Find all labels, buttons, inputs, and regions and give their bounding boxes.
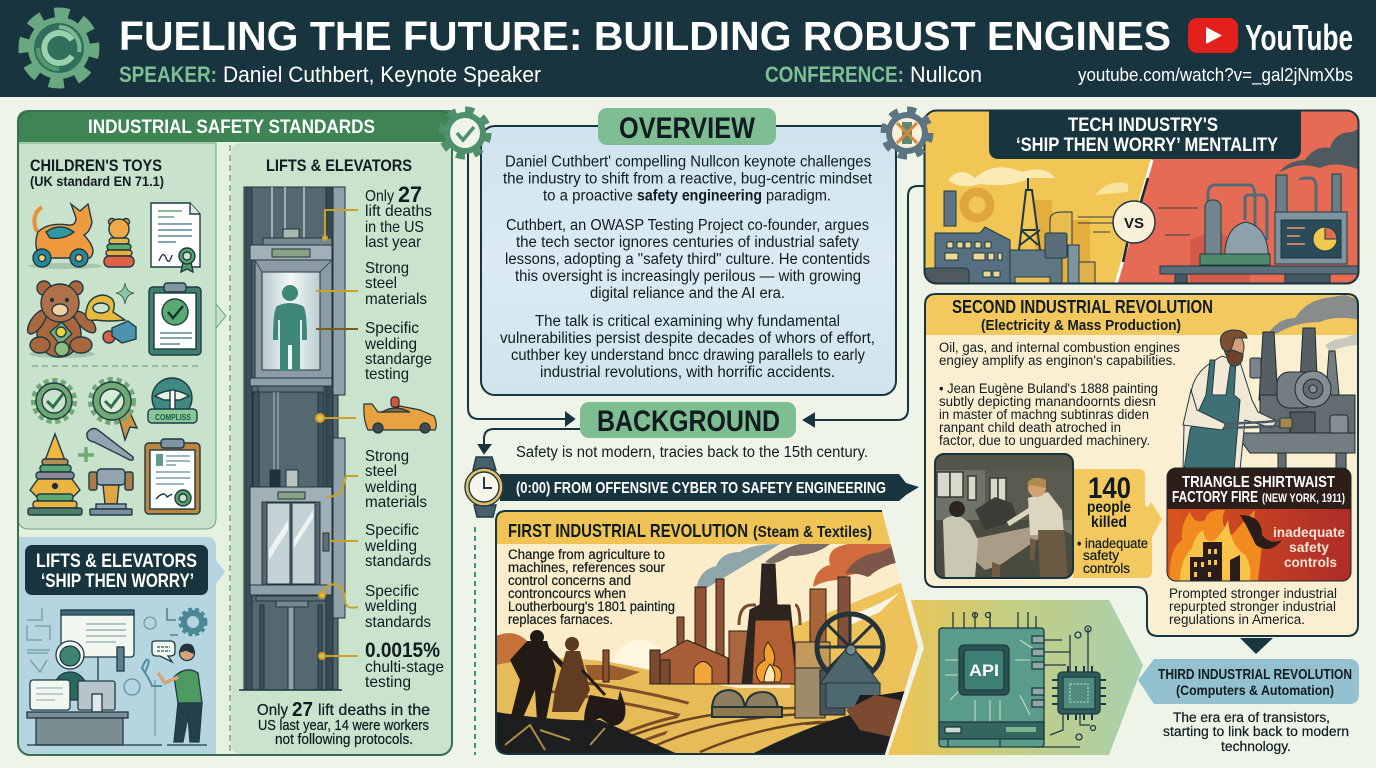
overview paragraph 1: Daniel Cuthbert' compelling Nullcon keynote challenges xyxy=(505,154,871,170)
panel: lifts and elevators ship then worry xyxy=(18,537,225,754)
farmer silhouettes and plough xyxy=(510,630,625,726)
callout: specific welding standards second xyxy=(364,583,431,631)
yellow side factory xyxy=(924,178,1095,284)
smoke clouds xyxy=(697,544,896,588)
panel: triangle shirtwaist factory fire xyxy=(1167,468,1351,582)
illustration: elevator shaft xyxy=(239,187,345,690)
background intro: Safety is not modern, tracies back to the 15th century. xyxy=(516,444,868,461)
icon: safety check badge xyxy=(34,381,74,421)
callout: multi-stage testing percentage: 0.0015% xyxy=(365,639,440,662)
callout: 27 lift deaths xyxy=(365,182,432,251)
illustration: steam era landscape xyxy=(496,511,920,755)
callout: people killed: 140 xyxy=(1088,472,1131,505)
panel: tech industry ship then worry mentality xyxy=(924,110,1360,285)
callout: specific welding standards second: Specific xyxy=(365,583,419,600)
heading: triangle shirtwaist: TRIANGLE SHIRTWAIST xyxy=(1182,474,1335,491)
icon: award ribbon badge xyxy=(91,380,137,440)
lift deaths summary: Only xyxy=(257,702,288,719)
callout: specific welding testing: testing xyxy=(365,366,409,383)
heading: triangle shirtwaist: (NEW YORK, 1911) xyxy=(1262,491,1345,505)
second revolution painting note: ranpant child death atroched in xyxy=(939,420,1121,435)
divider xyxy=(32,365,201,367)
second revolution painting note: subtly depicting manandoornts diesn xyxy=(939,394,1156,409)
distant fields xyxy=(497,633,527,665)
icon: ride-on cat toy xyxy=(28,204,102,269)
callout: strong steel materials: steel xyxy=(365,275,397,292)
heading: children's toys: CHILDREN'S TOYS xyxy=(30,156,162,175)
callout: strong steel welding materials: materials xyxy=(365,494,427,511)
callout: specific welding testing: standarge xyxy=(365,351,432,368)
callout: specific welding standards: welding xyxy=(364,538,417,555)
dashed column divider xyxy=(229,145,231,754)
callout: strong steel welding materials xyxy=(364,448,427,511)
panel: first industrial revolution xyxy=(496,511,920,755)
panel: third industrial revolution xyxy=(1138,659,1359,704)
icon: orange car xyxy=(364,397,436,433)
heading: second industrial revolution xyxy=(952,297,1213,334)
video url: youtube.com/watch?v=_gal2jNmXbs xyxy=(1078,65,1353,86)
callout leader lines xyxy=(316,210,358,659)
icon: circuit board with API chip xyxy=(939,612,1106,747)
lift deaths summary: lift deaths in the xyxy=(318,702,430,719)
callout: people killed: killed xyxy=(1091,514,1127,531)
speaker: SPEAKER: xyxy=(119,62,217,87)
second revolution intro: Oil, gas, and internal combustion engines xyxy=(939,340,1180,355)
callout: strong steel materials xyxy=(365,260,427,308)
callout: 27 lift deaths: lift deaths xyxy=(365,203,432,220)
icon: wristwatch xyxy=(465,457,503,517)
red side plant xyxy=(1160,174,1360,284)
first revolution body text: controncourcs when xyxy=(508,586,626,601)
overview paragraph 1 xyxy=(503,154,873,204)
second revolution intro: engiey amplify as enginon's capabilities. xyxy=(939,353,1176,368)
overview paragraph 2: lessons, adopting a "safety third" culture. He contentids xyxy=(505,251,870,268)
icon: checklist clipboard xyxy=(149,283,201,355)
fire callout text: controls xyxy=(1284,554,1337,570)
panel: overview xyxy=(481,108,896,395)
first revolution body text: Loutherbourg's 1801 painting xyxy=(508,599,675,614)
fire callout text: inadequate xyxy=(1273,524,1345,540)
overview paragraph 3: cuthber key understand bncc drawing parallels to early xyxy=(511,347,865,364)
illustration: yellow industry versus red industry xyxy=(924,110,1360,285)
callout: 27 lift deaths: in the US xyxy=(365,219,424,236)
overview paragraph 1: the industry to shift from a reactive, bug-centric mindset xyxy=(503,170,873,188)
fire callout text xyxy=(1273,524,1345,570)
arrow: down to third revolution xyxy=(1240,638,1273,654)
icon: compliance seal xyxy=(148,378,197,423)
section heading bar: INDUSTRIAL SAFETY STANDARDS xyxy=(88,117,375,138)
illustration: smoke stacks xyxy=(1270,295,1360,334)
first revolution body text: control concerns and xyxy=(508,573,631,588)
heading: overview: OVERVIEW xyxy=(619,112,756,145)
heading: tech industry mentality: TECH INDUSTRY'S xyxy=(1068,115,1218,136)
callout: people killed: people xyxy=(1087,499,1131,516)
fire consequence text: Prompted stronger industrial xyxy=(1169,586,1337,601)
illustration: factory machinery xyxy=(1235,328,1355,471)
panel: third revolution chip chevron xyxy=(888,600,1143,755)
icon: plus sign xyxy=(78,447,94,462)
heading: children's toys xyxy=(30,156,164,189)
callout: multi-stage testing percentage: chulti-stage xyxy=(365,659,444,676)
conference: CONFERENCE: xyxy=(765,62,904,87)
first revolution body text: machines, references sour xyxy=(508,560,665,575)
callout: 27 lift deaths: Only xyxy=(365,188,394,205)
second revolution painting note: factor, due to unguarded machinery. xyxy=(939,433,1150,448)
lift deaths summary xyxy=(257,699,430,748)
first revolution body text xyxy=(508,547,675,627)
overview paragraph 1: safety engineering xyxy=(637,188,762,204)
icon: green check gear xyxy=(443,111,487,155)
callout: people killed xyxy=(1073,469,1162,578)
label: ship then worry: ‘SHIP THEN WORRY’ xyxy=(41,571,194,592)
header banner xyxy=(0,0,1376,97)
overview paragraph 3: industrial revolutions, with horrific accidents. xyxy=(540,364,835,381)
callout: specific welding standards second: welding xyxy=(364,598,417,615)
first revolution body text: Change from agriculture to xyxy=(508,547,665,562)
callout: strong steel materials: materials xyxy=(365,291,427,308)
overview paragraph 2: Cuthbert, an OWASP Testing Project co-founder, argues xyxy=(506,217,869,234)
overview paragraph 1: paradigm. xyxy=(766,188,831,204)
lift deaths summary: US last year, 14 were workers xyxy=(258,718,429,734)
timeline banner xyxy=(500,474,919,501)
second revolution painting note: in master of machng subtinras diden xyxy=(939,407,1149,422)
heading: second industrial revolution: (Electricity & Mass Production) xyxy=(981,317,1181,334)
fire callout text: safety xyxy=(1289,539,1329,555)
icon: person in lift xyxy=(273,285,307,371)
overview paragraph 2: this oversight is increasingly perilous — with growing xyxy=(515,268,861,285)
overview paragraph 2: digital reliance and the AI era. xyxy=(590,285,785,302)
label: ship then worry xyxy=(25,545,208,595)
overview paragraph 1: to a proactive xyxy=(543,188,633,204)
speaker: Daniel Cuthbert, Keynote Speaker xyxy=(223,62,541,87)
heading: background: BACKGROUND xyxy=(597,405,780,438)
callout: 27 lift deaths: 27 xyxy=(398,182,422,207)
fire consequence text: repurpted stronger industrial xyxy=(1169,599,1336,614)
callout: specific welding standards: standards xyxy=(365,553,431,570)
callout: specific welding standards second: standards xyxy=(365,614,431,631)
icon: bear ring stacker xyxy=(104,218,134,267)
overview paragraph 2 xyxy=(505,217,870,302)
overview paragraph 3: vulnerabilities persist despite decades of whors of effort, xyxy=(500,330,875,347)
section heading bar xyxy=(17,110,451,142)
callout: specific welding testing: welding xyxy=(364,336,417,353)
second revolution intro xyxy=(939,340,1180,368)
callout: people killed: • inadequate xyxy=(1077,536,1148,551)
icon: YouTube logo xyxy=(1188,17,1353,58)
icon: circuit board with API chip: API xyxy=(969,661,999,680)
icon: stacking cone toy xyxy=(28,434,82,515)
callout: multi-stage testing percentage xyxy=(365,639,444,691)
icon: compliance seal: COMPLISS xyxy=(155,413,192,422)
heading: second industrial revolution: SECOND INDUSTRIAL REVOLUTION xyxy=(952,297,1213,317)
fire consequence text xyxy=(1169,586,1337,627)
overview paragraph 3: The talk is critical examining why fundamental xyxy=(535,313,840,330)
third revolution text: technology. xyxy=(1221,739,1291,754)
panel: second industrial revolution xyxy=(924,293,1360,638)
illustration: factory flames xyxy=(1170,510,1262,581)
third revolution text: starting to link back to modern xyxy=(1163,724,1349,739)
heading: first industrial revolution: (Steam & Textiles) xyxy=(753,524,872,541)
label: versus xyxy=(1113,201,1155,243)
overview paragraph 3 xyxy=(500,313,875,381)
third revolution text xyxy=(1163,710,1349,754)
first revolution body text: replaces farnaces. xyxy=(508,612,613,627)
icon: signed clipboard xyxy=(145,439,200,514)
heading: children's toys: (UK standard EN 71.1) xyxy=(30,174,164,189)
factory buildings xyxy=(603,564,850,718)
heading: tech industry mentality xyxy=(989,111,1301,159)
lift deaths summary: not following protocols. xyxy=(275,732,413,748)
heading: first industrial revolution: FIRST INDUSTRIAL REVOLUTION xyxy=(508,521,748,541)
callout: strong steel materials: Strong xyxy=(365,260,409,277)
icon: crossed tools gear xyxy=(885,111,929,155)
overview paragraph 2: the tech sector ignores centuries of industrial safety xyxy=(516,234,859,251)
icon: teddy bear with toys xyxy=(24,281,136,358)
callout: people killed: safety xyxy=(1083,548,1119,563)
callout: specific welding standards xyxy=(364,522,431,570)
callout: strong steel welding materials: steel xyxy=(365,463,397,480)
connector lines xyxy=(468,150,924,755)
icon: certificate document xyxy=(151,203,200,272)
callout: strong steel welding materials: welding xyxy=(364,479,417,496)
callout: 27 lift deaths: last year xyxy=(365,234,422,251)
icon: cycle gear logo xyxy=(19,8,99,88)
panel: lifts and elevators column xyxy=(231,143,451,754)
panel: children's toys xyxy=(18,143,226,529)
icon: wrench xyxy=(87,429,133,460)
second revolution painting note: • Jean Eugène Buland's 1888 painting xyxy=(939,381,1158,396)
steam tender wheels xyxy=(712,690,782,717)
label: ship then worry: LIFTS & ELEVATORS xyxy=(36,551,197,572)
illustration: child labour factory painting xyxy=(935,454,1073,578)
diagonal divider xyxy=(1116,160,1152,284)
callout: multi-stage testing percentage: testing xyxy=(365,674,411,691)
second revolution painting note xyxy=(939,381,1158,448)
illustration: worker at bench xyxy=(1183,330,1292,470)
callout: strong steel welding materials: Strong xyxy=(365,448,409,465)
heading: triangle shirtwaist: FACTORY FIRE xyxy=(1172,489,1258,506)
label: versus: VS xyxy=(1124,215,1144,232)
panel outline xyxy=(18,111,452,755)
illustration: developer at desk and engineer xyxy=(27,608,207,745)
flywheel engine xyxy=(817,614,883,708)
timeline banner: (0:00) FROM OFFENSIVE CYBER TO SAFETY ENGINEERING xyxy=(516,480,886,497)
heading: lifts and elevators: LIFTS & ELEVATORS xyxy=(266,156,412,175)
callout: people killed: controls xyxy=(1083,561,1130,576)
icon: bench vise xyxy=(89,469,133,515)
heading: triangle shirtwaist xyxy=(1172,474,1345,506)
conference: Nullcon xyxy=(910,62,982,87)
fire consequence text: regulations in America. xyxy=(1169,612,1305,627)
heading: tech industry mentality: ‘SHIP THEN WORRY’ MENTALITY xyxy=(1016,135,1278,156)
callout: specific welding testing: Specific xyxy=(365,320,419,337)
title: FUELING THE FUTURE: BUILDING ROBUST ENGINES xyxy=(119,13,1171,59)
callout: specific welding testing xyxy=(364,320,432,383)
lift deaths summary: 27 xyxy=(292,699,313,721)
foreground earth xyxy=(496,690,912,755)
panel: third industrial revolution: (Computers & Automation) xyxy=(1176,682,1334,698)
third revolution text: The era era of transistors, xyxy=(1173,710,1330,725)
callout: specific welding standards: Specific xyxy=(365,522,419,539)
